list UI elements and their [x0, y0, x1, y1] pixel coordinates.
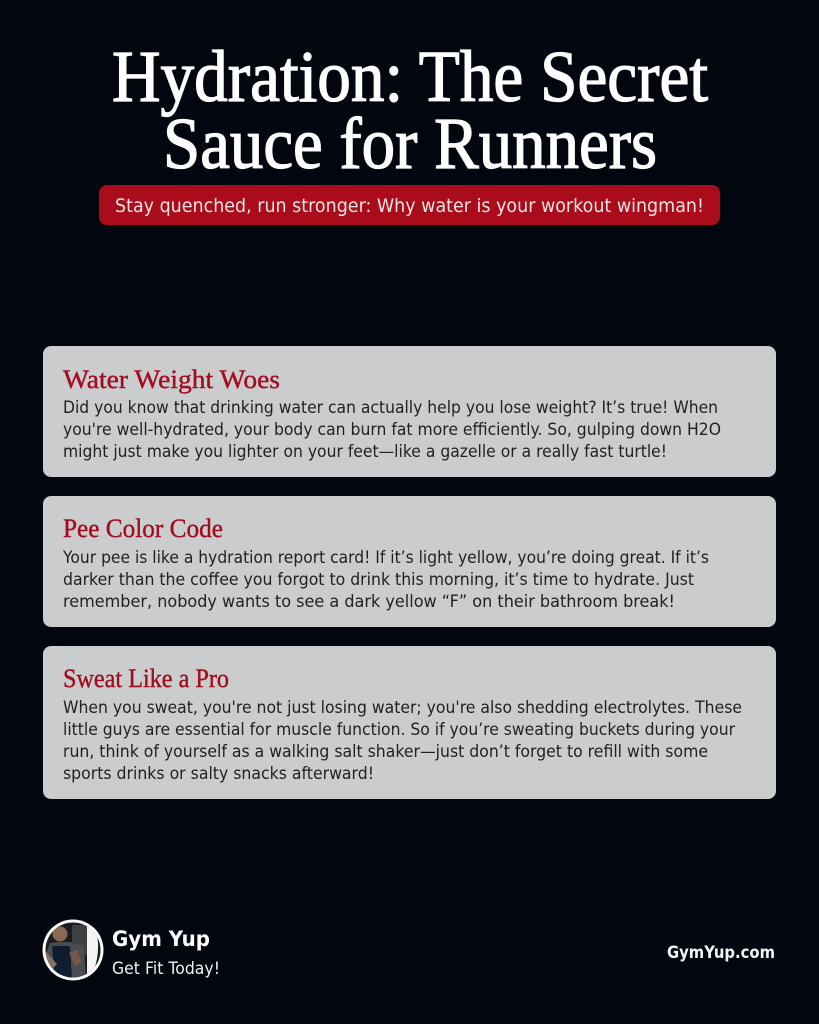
panel: water weight woes: [43, 346, 776, 477]
text block: pee color code: darker than the coffee you forgot to drink this morning, it’s time to hydrate. Just: [63, 570, 694, 589]
icon: profile photo: [42, 920, 104, 980]
text block: pee color code: [62, 548, 709, 611]
panel: pee color code: [43, 496, 776, 627]
brand name: Gym Yup: [112, 927, 210, 952]
text block: pee color code: remember, nobody wants to see a dark yellow “F” on their bathroom break!: [63, 592, 675, 611]
text block: sweat like a pro: When you sweat, you're not just losing water; you're also shedding electrolytes. These: [63, 698, 742, 717]
text block: sweat like a pro: sports drinks or salty snacks afterward!: [63, 764, 374, 783]
brand tagline: Get Fit Today!: [112, 959, 220, 978]
heading: pee color code: Pee Color Code: [63, 514, 223, 543]
panel: sweat like a pro: [43, 646, 776, 799]
title: Sauce for Runners: [163, 103, 657, 184]
text block: water weight woes: you're well-hydrated, your body can burn fat more efficiently. So, gulping down H2O: [63, 420, 721, 439]
subtitle banner: Stay quenched, run stronger: Why water is your workout wingman!: [115, 196, 704, 217]
text block: water weight woes: might just make you lighter on your feet—like a gazelle or a really fast turtle!: [63, 442, 667, 461]
text block: sweat like a pro: little guys are essential for muscle function. So if you’re sweating buckets during your: [63, 720, 735, 739]
title: [112, 36, 708, 184]
website: GymYup.com: [667, 943, 775, 962]
text block: water weight woes: [63, 398, 721, 461]
text block: water weight woes: Did you know that drinking water can actually help you lose weight? It’s true! When: [63, 398, 718, 417]
subtitle banner: [99, 185, 720, 225]
heading: water weight woes: Water Weight Woes: [63, 365, 280, 394]
text block: sweat like a pro: run, think of yourself as a walking salt shaker—just don’t forget to refill with some: [63, 742, 708, 761]
text block: sweat like a pro: [63, 698, 742, 783]
heading: sweat like a pro: Sweat Like a Pro: [63, 664, 229, 693]
title: Hydration: The Secret: [112, 36, 708, 117]
text block: pee color code: Your pee is like a hydration report card! If it’s light yellow, you’re doing great. If it’s: [62, 548, 709, 567]
